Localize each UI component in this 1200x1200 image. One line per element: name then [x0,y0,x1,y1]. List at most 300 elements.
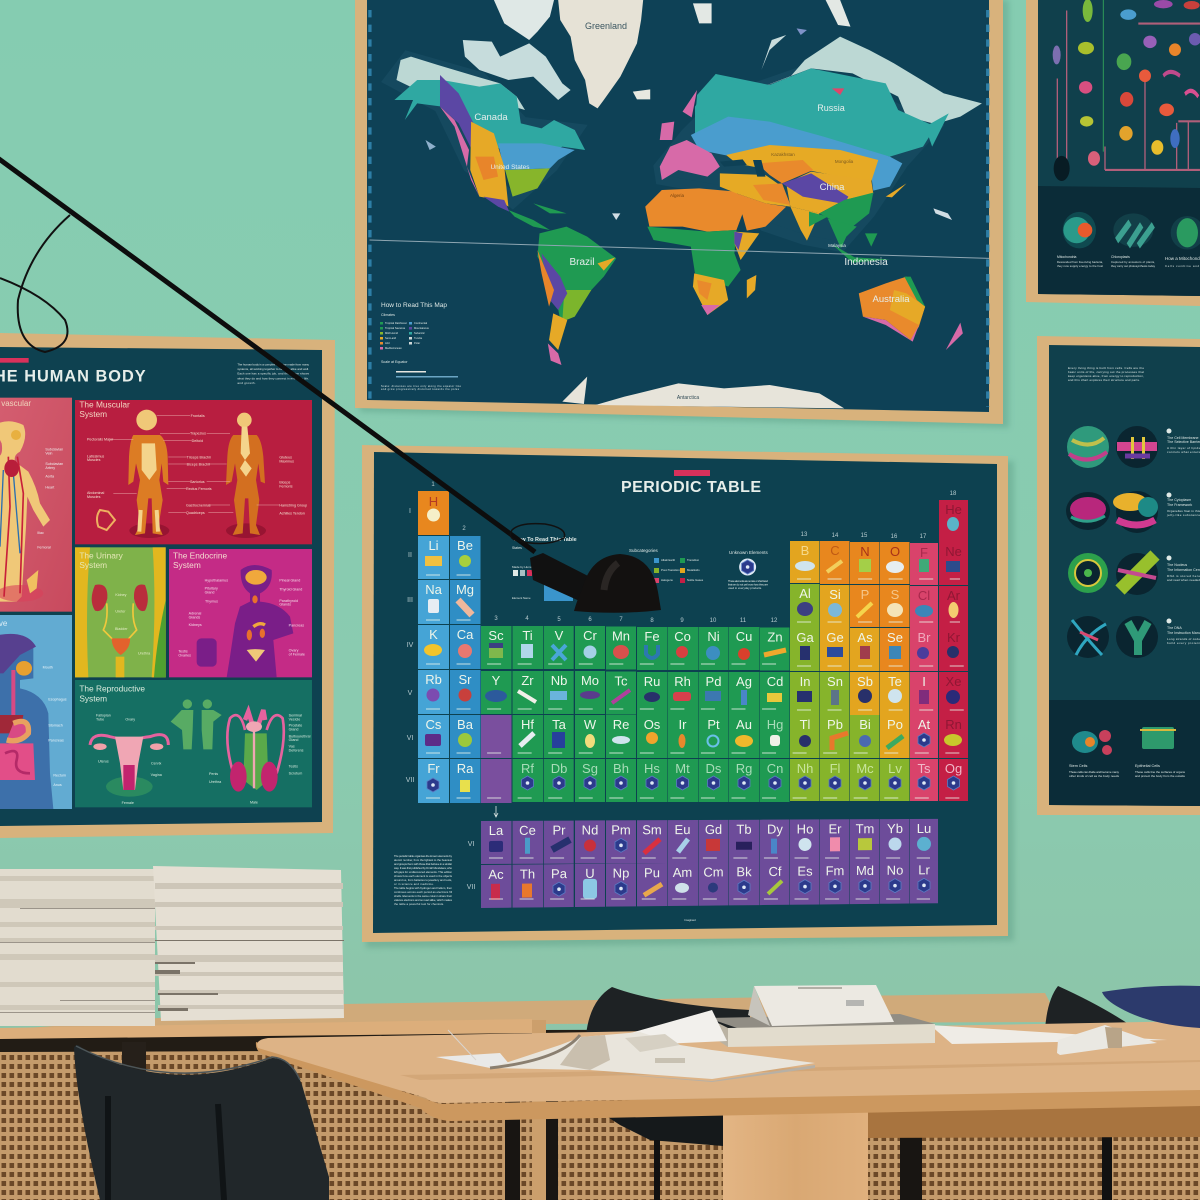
group numbers: 5 [557,617,561,623]
row IV: Ni [707,629,720,644]
panel: endocrine: Glands [189,615,200,619]
items on the table [436,985,1167,1082]
period numerals: VII [406,777,414,784]
map country labels: China [820,182,845,193]
map legend: Polar [414,341,420,345]
row VII: Ds [706,761,722,776]
panel: endocrine: Hypothalamus [205,579,228,583]
actinides: Md [856,863,874,878]
group numbers: 12 [771,618,778,624]
panel: endocrine: Thyroid Gland [279,588,302,592]
row VI: Au [736,717,752,732]
group numbers: 2 [462,526,466,532]
loose sheets [627,1010,727,1045]
actinides: Fm [826,863,844,878]
period numerals: II [408,552,412,559]
how to read legend: used in everyday products. [728,586,762,590]
group numbers: 17 [920,534,927,540]
lower left paragraph: left gaps for undiscovered elements. This edition [394,870,452,874]
panel: muscular: Maximus [279,460,294,464]
panel: digestive: Esophagus [48,698,67,702]
row V: Xe [946,674,961,689]
intro text: and growth. [237,381,256,385]
panel: muscular: The Muscular [79,400,130,410]
cell text columns: The Nucleus [1167,563,1187,567]
tree caption text [1057,255,1200,268]
row I: He [945,502,962,517]
map country labels: Indonesia [844,257,888,268]
how to read legend: Alkali Earth [661,558,676,562]
row VII: Hs [644,761,660,776]
lamp neck [530,553,592,603]
panel: reproductive: Female [122,801,134,805]
panel: endocrine: Pancreas [289,623,304,627]
map country labels: Kazakhstan [771,152,795,157]
how to read legend: Post-Transition [661,568,680,572]
how to read legend: States [512,546,522,550]
row III: Cl [918,588,930,603]
row VI: Os [644,717,661,732]
row VII: Ra [457,761,474,776]
cell intro text: Every living thing is built from cells. Cells are the [1068,366,1144,370]
group numbers: 16 [891,534,898,540]
panel: endocrine: Glands [279,602,291,606]
how to read legend: Subcategories [629,548,659,553]
map country labels: Greenland [585,21,627,31]
lanthanides: Gd [705,822,722,837]
cell text columns: The Cytoplasm [1167,498,1191,502]
map legend: Mediterranean [385,346,402,350]
row VI: Re [613,717,629,732]
lower left paragraph: valence electrons and so react alike, which makes [394,898,453,902]
row III: Mg [456,582,474,597]
panel: urinary [75,547,166,677]
panel: urinary: Ureter [115,610,126,614]
actinides: Cm [703,864,724,880]
lower left paragraph: and groups them with those that behave in a similar [394,862,452,866]
lower left paragraph: way. It was first published by Dmitri Mendeleev, who [394,866,452,870]
open magazine [490,1032,815,1079]
row V [418,670,968,715]
thick book [708,1014,935,1047]
lower left paragraph: around us, from batteries to jewellery and tools, [394,878,452,882]
panel: digestive: Stomach [48,724,63,728]
panel: reproductive: Urethra [209,780,222,784]
cell text columns: and protect the body from the outside [1135,774,1185,778]
panel: digestive: Rectum [53,774,66,778]
row IV: Ca [457,627,474,642]
panel: muscular: Biceps Brachii [187,462,210,466]
cell caption lines [426,575,968,899]
center chair back [586,987,750,1040]
actinide placeholder [481,759,512,803]
row II: Ne [945,544,962,559]
map legend: Tropical Savanna [385,326,406,330]
panel: reproductive: Testis [289,764,298,768]
row I: H [429,494,438,509]
panel: cardiovascular: Iliac [37,531,44,535]
panel: endocrine: Ovaries [178,653,191,657]
cell text columns: The Framework [1167,503,1192,507]
row V: Zr [521,673,534,688]
panel: reproductive: Fallopian [96,714,111,718]
right stack [153,866,344,1021]
how to read legend [512,537,769,601]
row II [418,536,968,585]
group numbers: 11 [740,618,747,624]
lanthanides: Tm [856,821,874,836]
row III [418,580,968,628]
panel: reproductive: Male [250,800,258,804]
lanthanides: Ho [797,821,813,837]
map country labels: Algeria [670,193,684,198]
group numbers: 10 [710,618,717,624]
flat book [930,1025,1167,1044]
map country labels: Brazil [569,257,595,268]
period numerals: I [409,508,411,515]
row V: Sn [827,674,843,689]
left stack [0,869,155,1026]
actinides: U [585,866,595,881]
lower left paragraph [394,854,453,906]
map legend: Scale: distances are true only along the equator line [381,384,462,388]
cell text columns: controls what enters [1167,450,1200,454]
panel: reproductive: Seminal [289,714,302,718]
map country labels: Canada [474,112,508,123]
how to read legend: that we do not yet know how they are [728,582,768,586]
cell intro text: keep organisms alive, from energy to reproduction, [1068,374,1144,378]
row VI: Ta [552,717,567,732]
how to read legend: Metalloids [687,568,700,572]
row VII: Bh [613,761,629,776]
panel: muscular: System [79,409,107,419]
panel: muscular: Hamstring Group [279,504,307,508]
actinides: Lr [918,862,930,877]
intro text: Each one has a specific job, and this poster shows [237,372,309,376]
row II: Be [457,538,473,553]
cell text columns: The Cell Membrane [1167,436,1199,440]
panel: endocrine [169,549,312,677]
group numbers: 9 [680,618,684,624]
group numbers: 8 [650,618,654,624]
row IV: Sc [488,628,504,643]
panel: muscular: Trapezius [190,432,206,436]
tree diagram [1053,0,1200,249]
napkin [1057,1025,1157,1055]
map legend: and grow progressively distorted towards the poles [381,387,460,391]
row VII: Mc [856,761,874,776]
panel: cardiovascular: Subclavian [45,448,63,452]
lanthanides: Eu [675,822,690,837]
row IV: Br [918,630,931,645]
actinides: No [887,863,903,878]
panel: endocrine: Kidneys [189,623,202,627]
row V: Ru [644,674,660,689]
cell text columns: and read when needed [1167,578,1200,582]
row VI: Rn [945,717,962,732]
sideboard [0,993,1200,1200]
row VI: Pb [827,717,843,732]
map legend: Continental [414,321,428,325]
panel: reproductive: Penis [209,772,218,776]
panel: muscular: Frontalis [191,414,205,418]
cell text columns: jelly-like substance [1166,513,1200,517]
group numbers: 14 [832,533,839,539]
badge [674,470,710,476]
panel: endocrine: Thymus [205,600,218,604]
panel: urinary: The Urinary [79,551,124,561]
lanthanides: Pr [552,823,566,838]
lower left paragraph: or in science and medicine. [394,882,434,886]
row VII: Db [551,761,567,776]
group numbers: 3 [494,616,498,622]
map legend: Tundra [414,336,423,340]
row IV: Ti [522,628,533,643]
row VI: Pt [707,717,720,732]
how to read legend: Noble Gases [687,578,704,582]
row VII: Fl [830,761,841,776]
group numbers: 18 [950,491,957,497]
panel: reproductive: Vesicle [289,717,300,721]
row IV: Fe [644,629,660,644]
panel: endocrine: Testis [178,650,188,654]
lower left paragraph: continues across each period as electrons fill [394,890,452,894]
period numerals: VI [407,735,413,742]
row IV: Ge [826,630,844,645]
panel: muscular: Muscles [87,458,101,462]
panel: muscular: Pectoralis Major [87,437,114,441]
panel: reproductive: Bulbourethral [289,734,311,738]
row V: Cd [767,674,783,689]
how to read legend: These elements are so rare or short-lived [728,579,768,583]
panel: muscular: Deltoid [192,439,203,443]
row VI: Ir [679,717,687,732]
male diagram [227,710,284,792]
how to read legend: Halogens [661,578,673,582]
row IV: Mn [612,628,630,644]
panel: endocrine: Parathyroid [279,599,298,603]
lanthanides: Yb [887,821,903,836]
map legend: Scale at Equator [381,360,408,364]
dark lower band [1049,700,1200,806]
group numbers: 7 [619,617,623,623]
title: PERIODIC TABLE [621,479,761,496]
map country labels [474,21,910,401]
tree caption text: Captured by ancestors of plants, [1111,260,1155,264]
panel: urinary: Kidney [115,593,127,597]
row IV: K [429,627,438,642]
row V: Rh [674,674,691,689]
panel: endocrine: Ovary [289,649,299,653]
row IV: Co [674,629,691,644]
standing white booklet [754,985,894,1026]
panel: endocrine: Gland [205,590,214,594]
period numerals: V [408,690,413,697]
panel: muscular: Muscles [87,495,101,499]
panel: endocrine: Pineal Gland [279,579,300,583]
lanthanides: Lu [917,821,931,836]
cell text columns: These cells line the surfaces of organs [1135,770,1186,774]
map country labels: Australia [873,294,910,305]
how to read legend: Element Name [512,596,531,600]
panel: muscular [75,400,312,544]
panel: cardiovascular: Subclavian [45,462,63,466]
heading [0,358,147,386]
lanthanides: Sm [642,822,662,837]
row VI: Hf [521,717,534,732]
poster: world climate map [355,0,1009,428]
row V: Mo [581,673,599,688]
row VI: W [584,717,597,732]
panel: reproductive [75,680,312,807]
small figures [171,699,222,749]
group numbers: 4 [525,616,529,622]
arrow to lanthanides [494,806,498,817]
actinides: Pa [551,866,568,881]
row II: N [860,544,870,559]
row VII: Rg [736,761,752,776]
map country labels: Malaysia [828,243,846,248]
cell text columns: other kinds of cell as the body needs [1069,774,1120,778]
row II: Li [428,538,439,553]
map country labels: United States [490,164,530,171]
row III: S [891,587,900,602]
period numerals: IV [407,642,414,649]
panel: digestive: Pancreas [48,739,64,743]
lanthanides: Dy [767,822,783,837]
lower left paragraph: the table a powerful tool for chemists. [394,902,444,906]
row VII: Mt [675,761,690,776]
poster: the human body [0,333,335,838]
row V: Ag [736,674,752,689]
actinides: Bk [736,864,752,879]
map country labels: Mongolia [835,159,854,164]
intro text: what they do and how they connect in everyday life. [237,376,309,380]
panel: reproductive: Deferens [289,748,304,752]
group numbers: 13 [801,532,808,538]
panel: urinary: System [79,560,107,570]
lanthanides: Ce [519,823,536,838]
row VI: Ba [457,717,474,732]
row IV [418,625,968,671]
row IV: Kr [947,630,961,645]
row III: Na [425,582,443,597]
row VII: Lv [888,761,902,776]
row II: C [830,543,840,558]
row II: B [801,543,809,558]
right chair back [1045,986,1130,1035]
panel: cardiovascular: Femoral [37,545,51,549]
panel: muscular: Gluteus [279,456,292,460]
row VII: Rf [521,761,534,776]
row IV: Se [887,630,903,645]
cell text columns: A thin layer of lipids [1167,446,1200,450]
row VII: Og [945,761,962,776]
row V: Y [492,673,501,688]
cell text columns: These cells can divide and become many [1069,770,1120,774]
panel: cardiovascular: Aorta [45,475,55,479]
book stacks [0,866,344,1026]
panel: urinary: Bladder [115,627,128,631]
group numbers: 1 [431,482,435,488]
row II: O [890,544,900,559]
cell text columns [1069,428,1200,778]
cell text columns: The DNA [1167,626,1182,630]
period numerals: III [407,597,413,604]
lower left paragraph: shells. Elements in the same column share their [394,894,452,898]
row V: I [922,674,926,689]
row V: In [800,674,810,689]
black chair [74,1045,329,1200]
map legend: How to Read This Map [381,302,447,309]
map legend [380,302,462,391]
actinides: Am [673,865,692,880]
poster: periodic table: Imagined [684,918,696,922]
poster: the cell [1037,336,1200,815]
row VII: Cn [767,761,783,776]
group numbers: 6 [588,617,592,623]
cell text columns: DNA is stored here [1167,574,1200,578]
actinides: Es [797,864,813,879]
panel: digestive: Anus [53,783,62,787]
row VI: Bi [859,717,871,732]
row VII: Fr [427,761,440,776]
cell text columns: Organelles float in this [1167,509,1200,513]
map legend: Climates [381,313,395,317]
lanthanides: Pm [611,822,631,837]
row VII: Ts [918,761,931,776]
panel: reproductive: Scrotum [289,772,302,776]
actinides: Ac [488,867,504,882]
panel: muscular: Sartorius [190,480,205,484]
row VI: Cs [426,717,442,732]
lower left paragraph: shows how each element is used in the objects [394,874,453,878]
row IV: Cr [583,628,598,643]
panel: muscular: Latissimus [87,454,104,458]
how to read legend: How To Read This Table [514,537,577,543]
actinides: Np [613,865,629,881]
cell circles [1066,426,1176,755]
lamp cable [0,215,70,352]
panel: reproductive: Tube [96,717,104,721]
row V: Rb [425,672,442,687]
map continents [370,0,989,408]
row V: Sb [857,674,873,689]
map country labels: Russia [817,103,845,113]
dark lower band [1038,186,1200,296]
panel: cardiovascular: vascular [1,399,31,408]
tree caption text: Mitochondria [1057,255,1077,259]
map legend: Semi-arid [385,336,397,340]
panel: reproductive: Cervix [151,761,162,765]
panel: endocrine: Pituitary [205,586,218,590]
row IV: Zn [767,630,783,644]
lower left paragraph: The table begins with hydrogen and helium, then [394,886,452,890]
row III: P [861,587,869,602]
poster: periodic table [362,445,1014,948]
map legend: Mountainous [414,326,430,330]
panel: muscular: Femoris [279,484,293,488]
panel: reproductive: Ovary [125,718,135,722]
panel: cardiovascular: Vein [45,452,52,456]
panel: cardiovascular [0,398,72,612]
group numbers: 15 [861,533,868,539]
row VI: At [918,717,931,732]
intro text: The human body is a complex machine made from many [237,362,309,366]
actinides [481,860,938,908]
row V: Te [888,674,902,689]
panel: digestive [0,615,72,809]
